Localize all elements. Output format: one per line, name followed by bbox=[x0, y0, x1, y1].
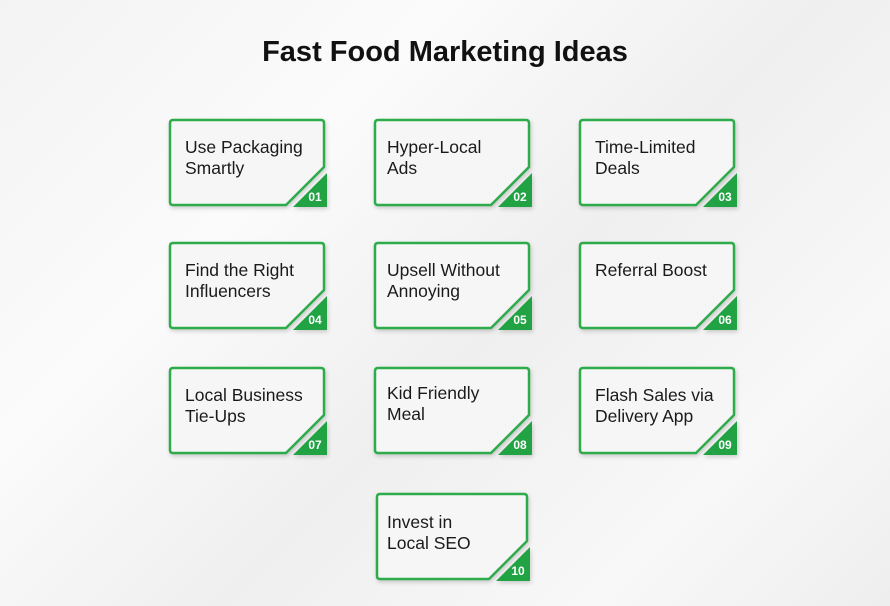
card 07 bbox=[168, 366, 330, 459]
card 01: Use Packaging bbox=[185, 137, 303, 157]
card 04: 04 bbox=[308, 313, 322, 327]
card 01: 01 bbox=[308, 190, 322, 204]
card 07: Tie-Ups bbox=[185, 406, 246, 426]
card 02: Ads bbox=[387, 158, 417, 178]
card 03: 03 bbox=[718, 190, 732, 204]
card 02 bbox=[373, 118, 535, 211]
card 09: 09 bbox=[718, 438, 732, 452]
card 06: 06 bbox=[718, 313, 732, 327]
card 04: Influencers bbox=[185, 281, 271, 301]
card 10 bbox=[375, 492, 533, 585]
card 08: Meal bbox=[387, 404, 425, 424]
card 07: 07 bbox=[308, 438, 322, 452]
card 03: Deals bbox=[595, 158, 640, 178]
card 05: Upsell Without bbox=[387, 260, 500, 280]
card 10: 10 bbox=[511, 564, 525, 578]
card 05: 05 bbox=[513, 313, 527, 327]
card 07: Local Business bbox=[185, 385, 303, 405]
card 09: Delivery App bbox=[595, 406, 693, 426]
card 09: Flash Sales via bbox=[595, 385, 714, 405]
card 10: Local SEO bbox=[387, 533, 471, 553]
card 04: Find the Right bbox=[185, 260, 294, 280]
title: Fast Food Marketing Ideas bbox=[262, 36, 628, 68]
card 08: 08 bbox=[513, 438, 527, 452]
card 09 bbox=[578, 366, 740, 459]
card 02: 02 bbox=[513, 190, 527, 204]
card 04 bbox=[168, 242, 330, 334]
card 02: Hyper-Local bbox=[387, 137, 481, 157]
card 03 bbox=[578, 118, 740, 211]
card 05 bbox=[373, 242, 535, 334]
card 05: Annoying bbox=[387, 281, 460, 301]
card 06 bbox=[578, 242, 740, 334]
card 10: Invest in bbox=[387, 512, 452, 532]
card 03: Time-Limited bbox=[595, 137, 695, 157]
card 01 bbox=[168, 118, 330, 211]
card 08 bbox=[373, 366, 535, 459]
card 08: Kid Friendly bbox=[387, 383, 479, 403]
card 01: Smartly bbox=[185, 158, 244, 178]
card 06: Referral Boost bbox=[595, 260, 707, 280]
